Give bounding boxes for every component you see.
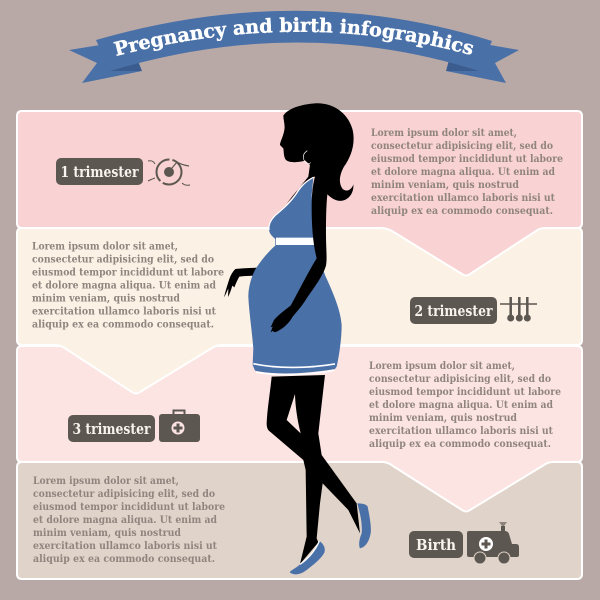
- second trimester text block: aliquip ex ea commodo consequat.: [32, 318, 214, 330]
- panel: birth: [17, 462, 582, 579]
- far arm: [224, 268, 257, 297]
- second trimester text block: exercitation ullamco laboris nisi ut: [32, 306, 216, 318]
- second trimester text block: Lorem ipsum dolor sit amet,: [32, 240, 178, 252]
- front shoe: [290, 541, 325, 574]
- birth text block: aliquip ex ea commodo consequat.: [33, 553, 215, 565]
- first trimester text block: et dolore magna aliqua. Ut enim ad: [371, 166, 556, 178]
- second trimester text block: [32, 240, 224, 330]
- silhouette: pregnant woman: [224, 103, 371, 574]
- dress sash: [276, 238, 314, 245]
- birth label: [409, 531, 463, 558]
- panel: third trimester: [17, 346, 582, 512]
- legs: [267, 375, 360, 564]
- first trimester label: 1 trimester: [60, 164, 139, 181]
- left fold: [110, 61, 142, 71]
- dress: [248, 177, 342, 373]
- second trimester label: 2 trimester: [414, 303, 493, 320]
- third trimester text block: eiusmod tempor incididunt ut labore: [369, 386, 561, 398]
- first trimester text block: eiusmod tempor incididunt ut labore: [371, 153, 563, 165]
- first trimester label: [56, 158, 143, 185]
- right fold: [446, 60, 479, 71]
- panel: first trimester: [17, 111, 582, 276]
- third trimester text block: minim veniam, quis nostrud: [369, 412, 518, 424]
- birth text block: exercitation ullamco laboris nisi ut: [33, 540, 217, 552]
- title ribbon: [69, 10, 519, 83]
- panel: second trimester: [17, 228, 582, 394]
- second trimester text block: eiusmod tempor incididunt ut labore: [32, 266, 224, 278]
- third trimester label: 3 trimester: [72, 421, 151, 438]
- icon: test tubes: [500, 297, 537, 322]
- third trimester text block: [369, 360, 561, 450]
- first trimester text block: aliquip ex ea commodo consequat.: [371, 205, 553, 217]
- third trimester text block: aliquip ex ea commodo consequat.: [369, 438, 551, 450]
- earring: [303, 151, 311, 164]
- first trimester text block: exercitation ullamco laboris nisi ut: [371, 192, 555, 204]
- left ribbon tail: [69, 45, 142, 83]
- birth text block: consectetur adipisicing elit, sed do: [33, 488, 215, 500]
- birth text block: [33, 475, 225, 565]
- third trimester text block: et dolore magna aliqua. Ut enim ad: [369, 399, 554, 411]
- icon: fertilized egg: [148, 160, 190, 185]
- third trimester text block: exercitation ullamco laboris nisi ut: [369, 425, 553, 437]
- neckline: [269, 177, 314, 230]
- birth text block: Lorem ipsum dolor sit amet,: [33, 475, 179, 487]
- back shoe: [357, 503, 371, 548]
- second trimester text block: consectetur adipisicing elit, sed do: [32, 254, 214, 266]
- third trimester text block: Lorem ipsum dolor sit amet,: [369, 360, 515, 372]
- gap between legs: [287, 394, 301, 433]
- second trimester text block: minim veniam, quis nostrud: [32, 292, 181, 304]
- icon: medical case: [159, 410, 200, 442]
- birth text block: eiusmod tempor incididunt ut labore: [33, 501, 225, 513]
- hem lines: [253, 364, 335, 375]
- icon: ambulance: [467, 522, 519, 564]
- first trimester text block: minim veniam, quis nostrud: [371, 179, 520, 191]
- right ribbon tail: [446, 45, 519, 83]
- birth text block: minim veniam, quis nostrud: [33, 527, 182, 539]
- hair, face and arm: [271, 103, 354, 332]
- second trimester label: [410, 297, 497, 324]
- first trimester text block: consectetur adipisicing elit, sed do: [371, 140, 553, 152]
- first trimester text block: Lorem ipsum dolor sit amet,: [371, 127, 517, 139]
- birth text block: et dolore magna aliqua. Ut enim ad: [33, 514, 218, 526]
- third trimester label: [68, 415, 155, 442]
- birth label: Birth: [416, 537, 456, 554]
- second trimester text block: et dolore magna aliqua. Ut enim ad: [32, 280, 217, 292]
- first trimester text block: [371, 127, 563, 217]
- title: Pregnancy and birth infographics: [113, 17, 474, 56]
- third trimester text block: consectetur adipisicing elit, sed do: [369, 373, 551, 385]
- ribbon band: [96, 11, 492, 71]
